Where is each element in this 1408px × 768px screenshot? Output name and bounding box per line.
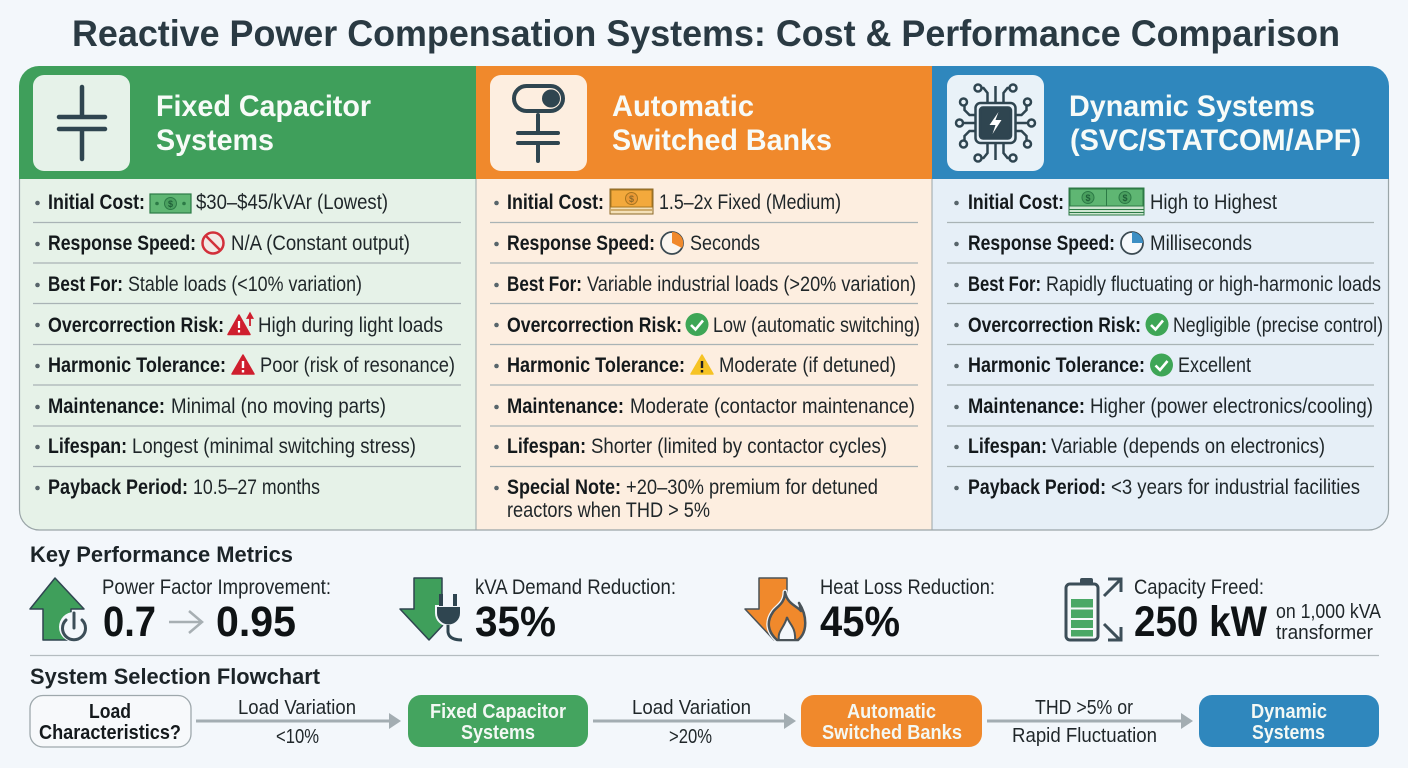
rows: automatic switched banks: Maintenance:: [507, 395, 624, 418]
metric: heat loss reduction: [745, 576, 995, 646]
rows: automatic switched banks: Harmonic Tolerance:: [507, 354, 685, 377]
node: fixed capacitor systems: Systems: [461, 722, 535, 744]
metric: power factor improvement: 0.7: [103, 598, 156, 646]
icon: green banknote: [150, 194, 191, 213]
rows: automatic switched banks: [490, 189, 920, 522]
rows: fixed capacitor: Longest (minimal switching stress): [132, 435, 416, 458]
rows: automatic switched banks: +20–30% premium for detuned: [626, 476, 878, 499]
rows: dynamic systems: Milliseconds: [1150, 232, 1252, 255]
icon: yellow warning: [691, 355, 713, 374]
metric: kva demand reduction: kVA Demand Reduction:: [475, 576, 676, 599]
node: dynamic systems: Dynamic: [1251, 701, 1327, 723]
metric: power factor improvement: Power Factor Improvement:: [102, 576, 331, 599]
rows: fixed capacitor: Poor (risk of resonance): [260, 354, 455, 377]
arrow: load variation under 10%: <10%: [276, 726, 319, 748]
metric: capacity freed: on 1,000 kVA: [1276, 601, 1382, 623]
arrow: load variation over 20%: >20%: [669, 726, 712, 748]
metric: capacity freed: transformer: [1276, 622, 1373, 644]
header: fixed capacitor: Fixed Capacitor: [156, 90, 371, 123]
rows: automatic switched banks: Best For:: [507, 273, 582, 296]
header: automatic switched banks: Automatic: [612, 90, 754, 123]
icon: down arrow with flame: [745, 578, 805, 640]
rows: dynamic systems: Variable (depends on electronics): [1051, 435, 1325, 458]
rows: fixed capacitor: Payback Period:: [48, 476, 188, 499]
icon: battery with arrows: [1066, 578, 1121, 640]
icon: orange banknote stack: $: [629, 194, 634, 204]
node: load characteristics: Characteristics?: [39, 722, 181, 744]
rows: automatic switched banks: reactors when THD > 5%: [507, 499, 710, 522]
arrow: thd or rapid fluctuation: Rapid Fluctuation: [1012, 725, 1157, 747]
rows: fixed capacitor: [33, 191, 461, 499]
metric: power factor improvement: [30, 576, 331, 646]
icon: two green banknote stacks: $: [1085, 193, 1091, 203]
header: automatic switched banks: Switched Banks: [612, 124, 832, 157]
node: automatic switched banks: Switched Banks: [822, 722, 962, 744]
heading: system selection flowchart: System Selection Flowchart: [30, 664, 321, 689]
icon: green check: [686, 313, 708, 336]
rows: dynamic systems: <3 years for industrial facilities: [1111, 476, 1360, 499]
metric: capacity freed: 250 kW: [1134, 598, 1267, 646]
metric: capacity freed: [1066, 576, 1382, 646]
rows: fixed capacitor: Stable loads (<10% variation): [128, 273, 362, 296]
rows: dynamic systems: Maintenance:: [968, 395, 1085, 418]
comparison table: [19, 66, 1389, 530]
arrow: thd or rapid fluctuation: THD >5% or: [1035, 697, 1133, 719]
node: automatic switched banks: [801, 695, 982, 747]
rows: fixed capacitor: Maintenance:: [48, 395, 165, 418]
rows: automatic switched banks: Special Note:: [507, 476, 621, 499]
rows: fixed capacitor: Best For:: [48, 273, 123, 296]
rows: automatic switched banks: Response Speed:: [507, 232, 655, 255]
heading: key performance metrics: Key Performance Metrics: [30, 542, 293, 567]
header: dynamic systems: (SVC/STATCOM/APF): [1070, 124, 1361, 157]
icon: orange clock: [661, 232, 683, 254]
rows: automatic switched banks: Shorter (limited by contactor cycles): [591, 435, 887, 458]
node: dynamic systems: [1199, 695, 1379, 747]
rows: automatic switched banks: Lifespan:: [507, 435, 586, 458]
rows: fixed capacitor: Overcorrection Risk:: [48, 314, 224, 337]
icon: down arrow with plug: [400, 578, 462, 640]
icon: green banknote: $: [168, 199, 173, 209]
rows: dynamic systems: Excellent: [1178, 354, 1251, 377]
icon: blue clock: [1121, 232, 1143, 254]
panel: dynamic systems: [932, 66, 1389, 530]
rows: dynamic systems: Initial Cost:: [968, 191, 1064, 214]
title: Reactive Power Compensation Systems: Cost & Performance Comparison: [72, 13, 1340, 54]
metric: power factor improvement: 0.95: [216, 598, 296, 646]
icon: red warning: [232, 355, 254, 374]
rows: automatic switched banks: Initial Cost:: [507, 191, 604, 214]
panel: automatic switched banks: [476, 66, 932, 530]
arrow: [169, 611, 202, 633]
rows: fixed capacitor: High during light loads: [258, 314, 443, 337]
panel: fixed capacitor systems: [19, 66, 476, 530]
arrow: load variation over 20%: Load Variation: [632, 697, 751, 719]
icon: capacitor symbol: [59, 87, 105, 159]
metric: kva demand reduction: [400, 576, 676, 646]
rows: automatic switched banks: Moderate (contactor maintenance): [630, 395, 915, 418]
rows: automatic switched banks: Seconds: [690, 232, 760, 255]
icon: green check: [1150, 354, 1173, 376]
header: fixed capacitor: [19, 66, 476, 179]
rows: fixed capacitor: 10.5–27 months: [193, 476, 320, 499]
icon: not applicable: [202, 232, 224, 254]
header: dynamic systems: Dynamic Systems: [1069, 90, 1315, 123]
rows: dynamic systems: High to Highest: [1150, 191, 1277, 214]
header: dynamic systems: [932, 66, 1389, 179]
rows: dynamic systems: Harmonic Tolerance:: [968, 354, 1145, 377]
rows: fixed capacitor: N/A (Constant output): [231, 232, 410, 255]
flowchart: [30, 695, 1379, 748]
icon: warning with up arrow: [228, 314, 252, 334]
rows: fixed capacitor: Lifespan:: [48, 435, 127, 458]
rows: dynamic systems: Response Speed:: [968, 232, 1115, 255]
metric: heat loss reduction: 45%: [820, 598, 900, 646]
rows: fixed capacitor: Minimal (no moving parts): [171, 395, 386, 418]
rows: dynamic systems: Payback Period:: [968, 476, 1106, 499]
rows: fixed capacitor: Response Speed:: [48, 232, 196, 255]
icon: up arrow with power symbol: [30, 578, 89, 642]
rows: automatic switched banks: Moderate (if detuned): [719, 354, 896, 377]
node: dynamic systems: Systems: [1252, 722, 1325, 744]
rows: automatic switched banks: 1.5–2x Fixed (Medium): [659, 191, 841, 214]
icon: orange banknote stack: [610, 189, 653, 214]
metric: capacity freed: Capacity Freed:: [1134, 576, 1264, 599]
arrow: load variation over 20%: [593, 697, 796, 748]
rows: fixed capacitor: $30–$45/kVAr (Lowest): [196, 191, 388, 214]
rows: dynamic systems: Best For:: [968, 273, 1041, 296]
rows: dynamic systems: [947, 188, 1383, 499]
icon: green check: [1146, 313, 1168, 336]
rows: automatic switched banks: Variable industrial loads (>20% variation): [587, 273, 916, 296]
icon: power chip: [956, 84, 1035, 162]
arrow: load variation under 10%: Load Variation: [238, 697, 356, 719]
node: load characteristics: [30, 696, 191, 747]
rows: automatic switched banks: Low (automatic switching): [713, 314, 920, 337]
node: automatic switched banks: Automatic: [847, 701, 936, 723]
metric: heat loss reduction: Heat Loss Reduction:: [820, 576, 995, 599]
node: fixed capacitor systems: Fixed Capacitor: [430, 701, 566, 723]
metric: kva demand reduction: 35%: [475, 598, 556, 646]
rows: dynamic systems: Lifespan:: [968, 435, 1047, 458]
rows: fixed capacitor: Harmonic Tolerance:: [48, 354, 226, 377]
icon: switched capacitor: [514, 86, 563, 161]
rows: dynamic systems: Overcorrection Risk:: [968, 314, 1141, 337]
icon: two green banknote stacks: $: [1122, 193, 1128, 203]
rows: fixed capacitor: Initial Cost:: [48, 191, 145, 214]
node: fixed capacitor systems: [408, 695, 588, 747]
rows: dynamic systems: Higher (power electronics/cooling): [1090, 395, 1373, 418]
arrow: thd or rapid fluctuation: [987, 697, 1193, 747]
header: fixed capacitor: Systems: [156, 124, 274, 157]
header: automatic switched banks: [476, 66, 932, 179]
rows: automatic switched banks: Overcorrection Risk:: [507, 314, 682, 337]
node: load characteristics: Load: [89, 701, 131, 723]
arrow: load variation under 10%: [196, 697, 401, 748]
icon: two green banknote stacks: [1069, 188, 1144, 215]
